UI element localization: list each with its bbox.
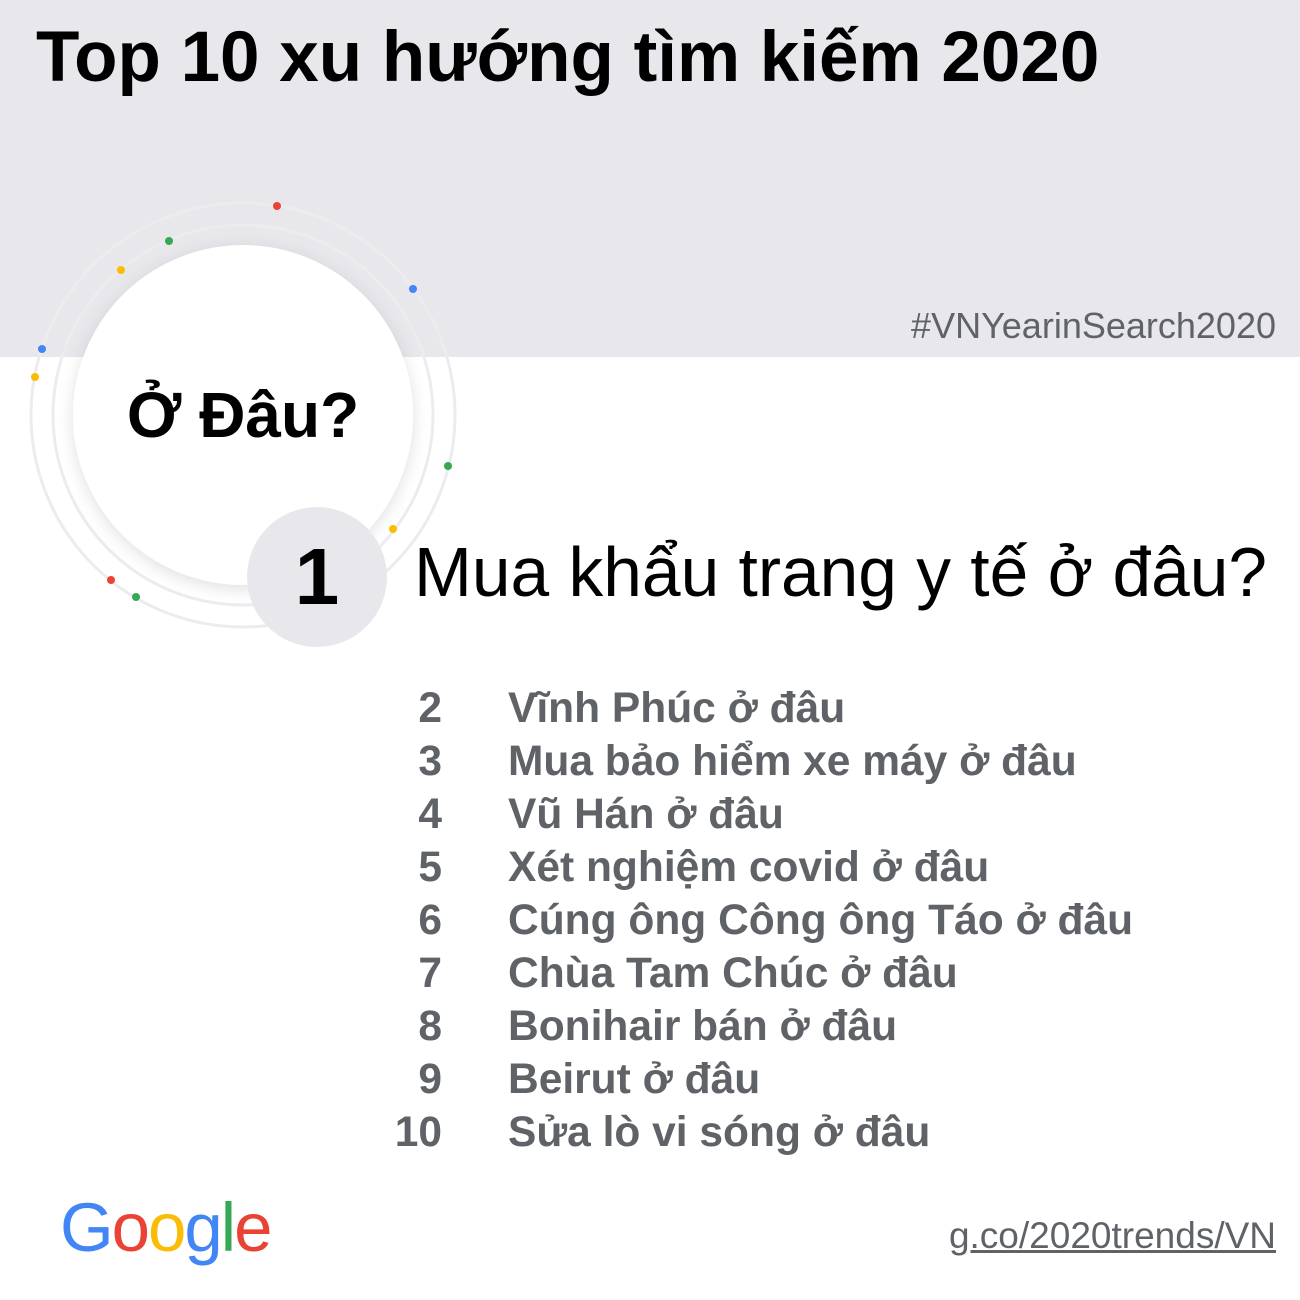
ranked list: 2: [418, 685, 442, 732]
ranked list: 3: [418, 738, 442, 785]
ranked list: [395, 685, 1133, 1156]
top result: Mua khẩu trang y tế ở đâu?: [414, 533, 1267, 611]
ranked list: Chùa Tam Chúc ở đâu: [508, 950, 958, 997]
ranked list: Sửa lò vi sóng ở đâu: [508, 1109, 930, 1156]
ranked list: Bonihair bán ở đâu: [508, 1003, 897, 1050]
ranked list: Vĩnh Phúc ở đâu: [508, 685, 845, 732]
ranked list: 7: [418, 950, 442, 997]
ranked list: Cúng ông Công ông Táo ở đâu: [508, 897, 1133, 944]
ranked list: 8: [418, 1003, 442, 1050]
category heading: Ở Đâu?: [127, 379, 359, 451]
hashtag: #VNYearinSearch2020: [911, 305, 1276, 346]
ranked list: 9: [418, 1056, 442, 1103]
ranked list: Mua bảo hiểm xe máy ở đâu: [508, 738, 1077, 785]
ranked list: Beirut ở đâu: [508, 1056, 760, 1103]
number 1 badge: 1: [295, 532, 339, 621]
ranked list: 4: [418, 791, 442, 838]
header band: [0, 0, 1300, 357]
title: Top 10 xu hướng tìm kiếm 2020: [36, 18, 1099, 97]
ranked list: Xét nghiệm covid ở đâu: [508, 844, 989, 891]
number 1 badge: [247, 507, 387, 647]
circle graphic: [30, 202, 456, 628]
google logo: Google: [60, 1189, 271, 1266]
ranked list: Vũ Hán ở đâu: [508, 791, 784, 838]
ranked list: 10: [395, 1109, 442, 1156]
ranked list: 6: [418, 897, 442, 944]
ranked list: 5: [418, 844, 442, 891]
link: g.co/2020trends/VN: [949, 1215, 1276, 1256]
